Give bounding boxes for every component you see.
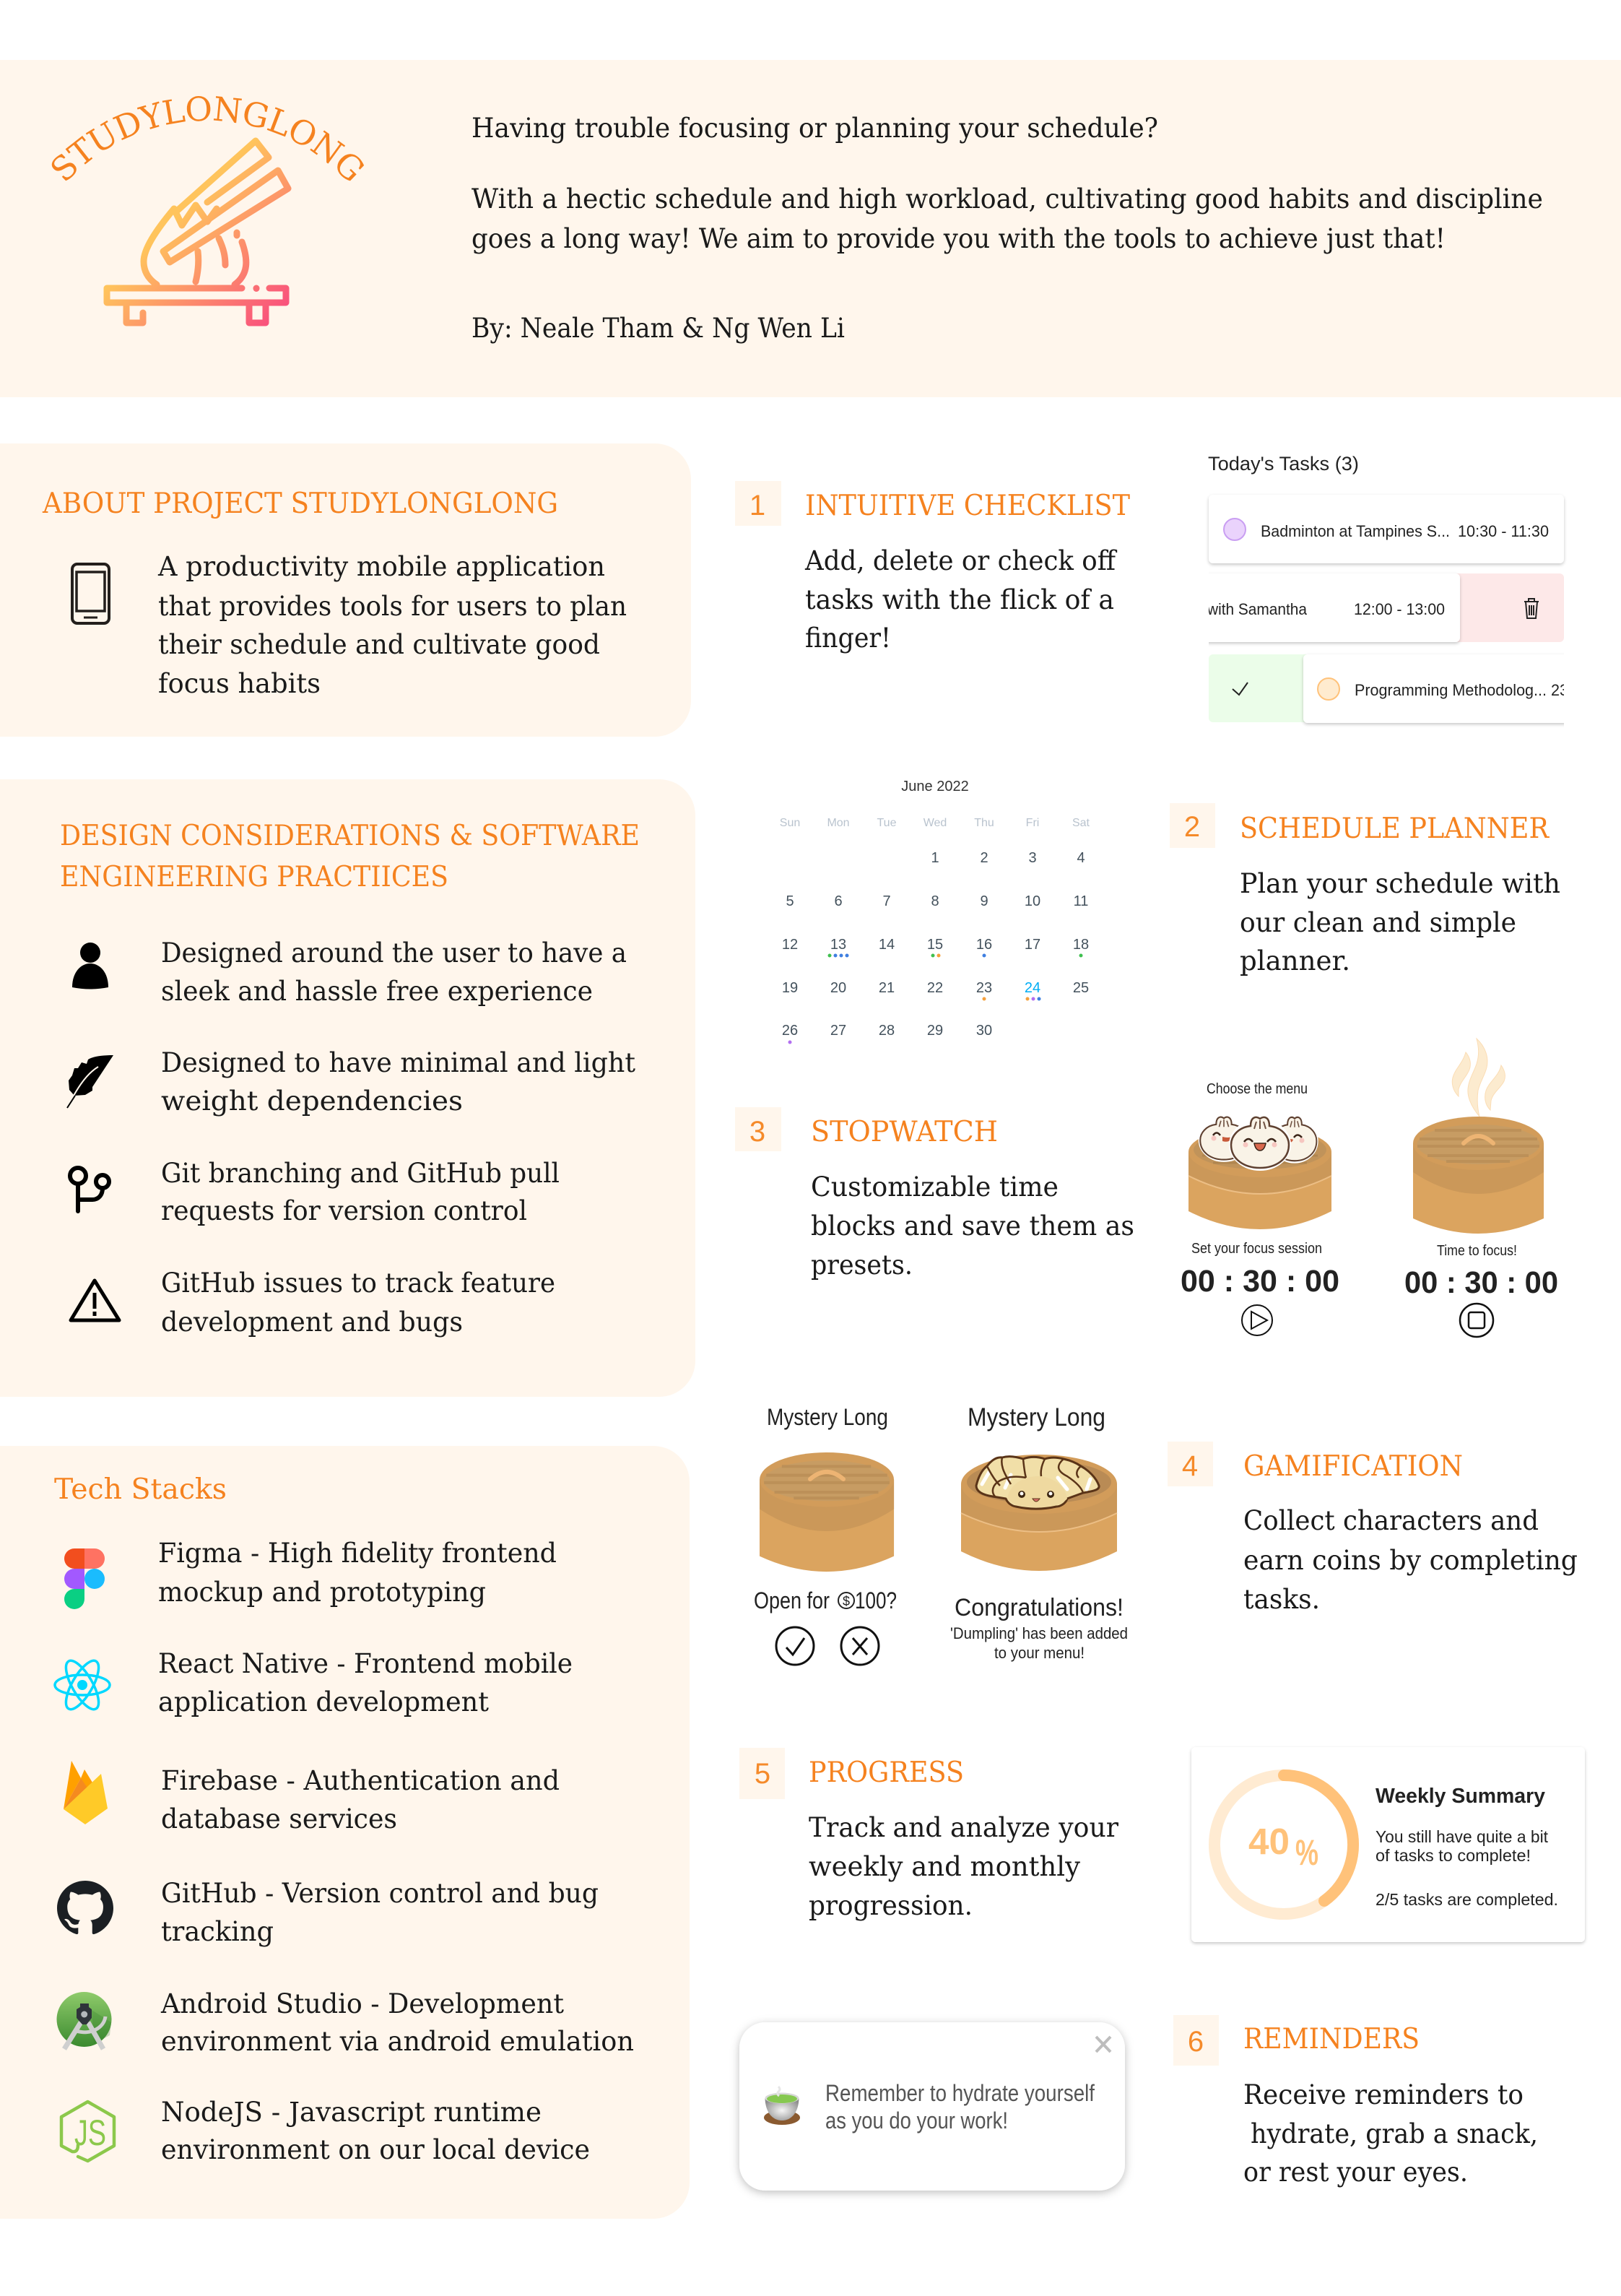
heading: design considerations: ENGINEERING PRACTIICES (60, 861, 448, 893)
dates: 6 (834, 893, 843, 909)
dates: 7 (882, 893, 891, 909)
event dots (788, 953, 1083, 1044)
reminder text: as you do your work! (825, 2107, 1008, 2133)
weekday headers: Sun (780, 817, 800, 829)
open for coins: $ (843, 1594, 850, 1608)
body: gamification: tasks. (1243, 1584, 1320, 1615)
panel: feature 2 schedule planner (780, 779, 1560, 1044)
logo (52, 96, 364, 326)
weekday headers: Wed (924, 817, 947, 829)
heading: tech stacks: Tech Stacks (54, 1473, 227, 1506)
screen: mystery long prompt (754, 1404, 897, 1665)
task card 1: 10:30 - 11:30 (1458, 522, 1549, 540)
body: checklist: finger! (805, 623, 891, 654)
task card 2 swiped to delete: with Samantha (1207, 600, 1308, 618)
steamer closed (1413, 1117, 1544, 1234)
dates: 2 (980, 850, 988, 866)
icon: nodejs (61, 2102, 114, 2161)
panel: feature 3 stopwatch (735, 1039, 1558, 1337)
text: nodejs: environment on our local device (161, 2134, 590, 2165)
text: firebase: database services (161, 1803, 397, 1834)
number badge 5: 5 (755, 1758, 770, 1790)
panel: design considerations (0, 779, 695, 1397)
reminder text (825, 2080, 1095, 2133)
dates: 25 (1073, 980, 1089, 996)
text: figma: Figma - High fidelity frontend (158, 1538, 557, 1569)
screen: dumpling reward: Congratulations! (955, 1594, 1124, 1621)
body: gamification (1243, 1505, 1578, 1615)
icon: cancel (841, 1627, 879, 1665)
panel: feature 5 progress (739, 1747, 1585, 1942)
dates: 3 (1028, 850, 1037, 866)
icon: play (1242, 1305, 1272, 1335)
body: stopwatch (811, 1171, 1134, 1281)
body: gamification: Collect characters and (1243, 1505, 1539, 1536)
body: schedule: our clean and simple (1240, 907, 1516, 938)
icon: user (72, 943, 108, 989)
logo wordmark: STUDYLONGLONG (52, 96, 364, 181)
text: user centred: Designed around the user to have a (161, 937, 627, 969)
task card 3 swiped to complete: Programming Methodolog... 23 (1355, 681, 1568, 699)
screen: choose the menu: Set your focus session (1191, 1241, 1322, 1257)
panel: feature 4 gamification (754, 1403, 1578, 1665)
body: reminders: or rest your eyes. (1243, 2157, 1468, 2188)
dates: 24 (1025, 980, 1040, 996)
screen: mystery long prompt: Mystery Long (767, 1404, 888, 1430)
weekday headers (780, 817, 1090, 829)
dates: 28 (879, 1023, 895, 1039)
about text: A productivity mobile application (157, 551, 605, 582)
icon: feather (67, 1055, 113, 1108)
icon: confirm (776, 1627, 814, 1665)
dates: 20 (830, 980, 846, 996)
number badge 5 (739, 1748, 785, 1799)
weekday headers: Mon (827, 817, 850, 829)
number badge 4 (1168, 1442, 1213, 1486)
popup: hydrate reminder (739, 2022, 1125, 2191)
body: progress: progression. (809, 1890, 973, 1921)
screen: time to focus: Time to focus! (1437, 1243, 1517, 1259)
dates: 9 (980, 893, 988, 909)
icon: stop (1460, 1304, 1493, 1337)
number badge 3: 3 (749, 1116, 765, 1148)
calendar (780, 779, 1090, 1044)
body: progress: Track and analyze your (809, 1812, 1118, 1843)
number badge 3 (735, 1107, 781, 1151)
dates: 11 (1074, 893, 1088, 909)
dates: 27 (830, 1023, 846, 1039)
body: checklist (804, 545, 1118, 654)
dates: 10 (1025, 893, 1040, 909)
open for coins (754, 1587, 897, 1613)
heading: about: ABOUT PROJECT STUDYLONGLONG (42, 488, 558, 520)
card: weekly summary (1191, 1747, 1585, 1942)
screen: choose the menu (1181, 1081, 1339, 1335)
checklist screenshot (1199, 453, 1578, 723)
icon: phone (72, 564, 109, 623)
text: light weight (161, 1047, 635, 1117)
text: github (161, 1878, 599, 1947)
panel: tech stacks (0, 1446, 690, 2219)
dates: 17 (1025, 937, 1040, 953)
icon: android studio (56, 1992, 111, 2049)
text: git: Git branching and GitHub pull (161, 1158, 560, 1189)
icon: git branch (70, 1168, 109, 1211)
dates: 22 (927, 980, 943, 996)
text: github: tracking (161, 1916, 274, 1947)
intro text: Having trouble focusing or planning your schedule? (471, 113, 1158, 144)
dates: 30 (976, 1023, 992, 1039)
steamer closed (760, 1452, 894, 1572)
screen: dumpling reward: 'Dumpling' has been added (950, 1624, 1128, 1642)
icon: github (57, 1881, 113, 1934)
text: android studio (160, 1988, 634, 2057)
body: stopwatch: presets. (811, 1249, 913, 1281)
text: light weight: weight dependencies (161, 1086, 463, 1117)
text: figma (158, 1538, 557, 1608)
weekday headers: Tue (877, 817, 897, 829)
summary text (1376, 1785, 1558, 1909)
body: checklist: Add, delete or check off (804, 545, 1118, 576)
body: progress (809, 1812, 1118, 1921)
body: reminders: Receive reminders to (1243, 2079, 1524, 2110)
body: reminders: hydrate, grab a snack, (1251, 2118, 1538, 2149)
text: github: GitHub - Version control and bug (161, 1878, 599, 1909)
text: user centred (161, 937, 627, 1007)
steam (1452, 1039, 1505, 1117)
body: stopwatch: blocks and save them as (811, 1210, 1134, 1242)
number badge 2: 2 (1184, 811, 1200, 843)
panel: feature 1 intuitive checklist (735, 453, 1578, 723)
icon: warning (71, 1281, 119, 1320)
icon: tea cup (764, 2087, 800, 2125)
heading: design considerations: DESIGN CONSIDERATIONS & SOFTWARE (60, 820, 640, 852)
dates: 5 (786, 893, 794, 909)
text: user centred: sleek and hassle free experience (161, 976, 593, 1007)
reminder text: Remember to hydrate yourself (825, 2080, 1095, 2106)
text: github issues: development and bugs (161, 1307, 463, 1338)
task card 1 (1209, 495, 1564, 563)
number badge 1 (735, 481, 781, 526)
icon: firebase (64, 1761, 108, 1824)
text: android studio: environment via android emulation (161, 2026, 634, 2057)
text: github issues: GitHub issues to track feature (161, 1268, 555, 1299)
text: react native (158, 1648, 573, 1717)
heading: stopwatch: STOPWATCH (811, 1116, 998, 1148)
body: stopwatch: Customizable time (811, 1171, 1059, 1203)
dates: 13 (830, 937, 846, 953)
icon: figma (64, 1548, 105, 1609)
dates (782, 850, 1089, 1039)
progress ring 40% (1214, 1775, 1353, 1914)
dates: 21 (879, 980, 895, 996)
task card 1: Badminton at Tampines S... (1261, 522, 1450, 540)
number badge 2 (1170, 803, 1215, 848)
summary text: 2/5 tasks are completed. (1376, 1890, 1558, 1909)
dates: 26 (782, 1023, 798, 1039)
icon: dumpling with chopsticks on a stand (107, 141, 288, 323)
text: figma: mockup and prototyping (158, 1577, 486, 1608)
steamer with dumpling (961, 1455, 1117, 1571)
text: github issues (161, 1268, 555, 1338)
body: progress: weekly and monthly (809, 1851, 1080, 1882)
screen: choose the menu: 00 : 30 : 00 (1181, 1264, 1339, 1299)
text: firebase: Firebase - Authentication and (161, 1765, 560, 1796)
intro text: goes a long way! We aim to provide you with the tools to achieve just that! (471, 223, 1446, 254)
weekday headers: Sat (1072, 817, 1090, 829)
screen: dumpling reward (950, 1403, 1128, 1662)
steamer with buns (1188, 1117, 1331, 1229)
body: schedule (1240, 868, 1560, 976)
dates: 29 (927, 1023, 943, 1039)
panel: feature 6 reminders (739, 2015, 1538, 2191)
number badge 4: 4 (1182, 1450, 1198, 1482)
heading: gamification: GAMIFICATION (1243, 1450, 1463, 1483)
heading: progress: PROGRESS (809, 1756, 964, 1789)
intro text (471, 113, 1543, 344)
icon: react (55, 1656, 110, 1714)
heading: schedule planner: SCHEDULE PLANNER (1240, 813, 1550, 845)
open for coins: Open for (754, 1587, 830, 1613)
dates: 14 (879, 937, 895, 953)
screen: time to focus: 00 : 30 : 00 (1404, 1265, 1558, 1300)
checklist title: Today's Tasks (3) (1208, 453, 1359, 475)
body: schedule: planner. (1240, 945, 1350, 976)
about text: that provides tools for users to plan (158, 591, 627, 622)
body: schedule: Plan your schedule with (1240, 868, 1560, 899)
intro text: With a hectic schedule and high workload, cultivating good habits and discipline (471, 183, 1543, 215)
open for coins: 100? (855, 1587, 897, 1613)
dates: 1 (931, 850, 939, 866)
dates: 19 (782, 980, 798, 996)
body: checklist: tasks with the flick of a (805, 584, 1114, 615)
dates: 18 (1073, 937, 1089, 953)
progress ring 40%: 40 (1248, 1821, 1290, 1862)
icon: close (1096, 2037, 1111, 2052)
weekday headers: Thu (974, 817, 994, 829)
heading: reminders: REMINDERS (1243, 2023, 1420, 2055)
task card 2 swiped to delete: 12:00 - 13:00 (1354, 600, 1445, 618)
text: firebase (161, 1765, 560, 1834)
dates: 12 (782, 937, 798, 953)
dates: 23 (976, 980, 992, 996)
number badge 6 (1173, 2015, 1219, 2066)
intro text: By: Neale Tham & Ng Wen Li (471, 313, 845, 344)
text: react native: application development (158, 1686, 489, 1717)
panel: about project (0, 443, 691, 737)
text: react native: React Native - Frontend mobile (158, 1648, 573, 1679)
text: nodejs (161, 2097, 590, 2165)
screen: dumpling reward: Mystery Long (968, 1403, 1105, 1431)
heading: intuitive checklist: INTUITIVE CHECKLIST (805, 490, 1130, 522)
weekday headers: Fri (1026, 817, 1039, 829)
text: git: requests for version control (161, 1195, 527, 1226)
body: gamification: earn coins by completing (1243, 1545, 1578, 1576)
body: reminders (1243, 2079, 1538, 2188)
calendar month: June 2022 (901, 779, 969, 794)
icon: nodejs: JS (74, 2113, 106, 2153)
screen: choose the menu: Choose the menu (1207, 1081, 1308, 1097)
summary text: of tasks to complete! (1376, 1846, 1531, 1865)
screen: dumpling reward: to your menu! (994, 1644, 1085, 1662)
task card 3 swiped to complete (1209, 654, 1578, 723)
about text: their schedule and cultivate good (158, 629, 600, 660)
about text: focus habits (158, 668, 321, 699)
dates: 15 (927, 937, 943, 953)
summary text: You still have quite a bit (1376, 1827, 1549, 1846)
heading: design considerations (60, 820, 640, 893)
task card 2 swiped to delete (1199, 573, 1564, 642)
dates: 8 (931, 893, 939, 909)
dates: 4 (1077, 850, 1085, 866)
summary text: Weekly Summary (1376, 1785, 1545, 1808)
header band (0, 60, 1621, 397)
text: android studio: Android Studio - Development (160, 1988, 564, 2019)
progress ring 40%: % (1295, 1832, 1318, 1873)
number badge 6: 6 (1188, 2026, 1204, 2058)
number badge 1: 1 (749, 490, 765, 521)
screen: time to focus (1404, 1039, 1558, 1337)
dates: 16 (976, 937, 992, 953)
text: nodejs: NodeJS - Javascript runtime (161, 2097, 542, 2128)
text: light weight: Designed to have minimal and light (161, 1047, 635, 1078)
text: git (161, 1158, 560, 1226)
about text (157, 551, 627, 699)
